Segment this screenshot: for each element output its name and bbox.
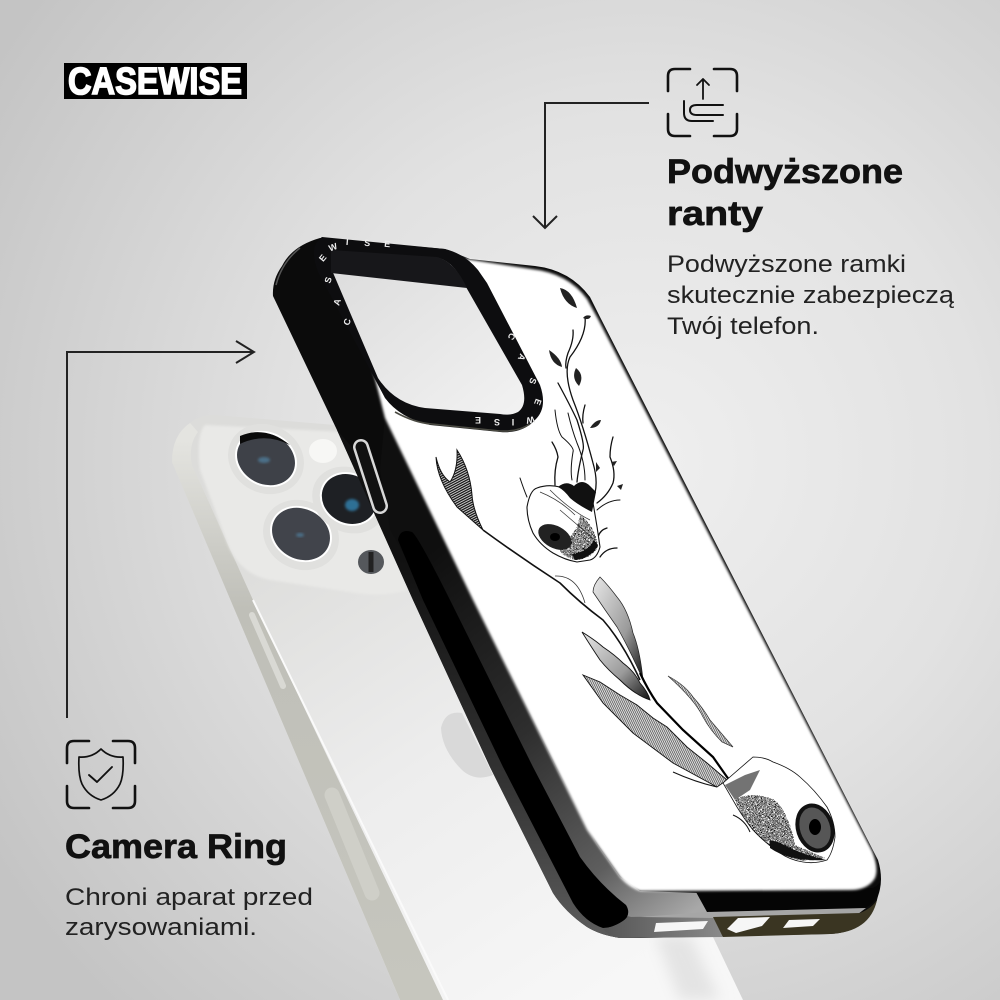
ring lettering: E	[384, 239, 391, 249]
bottom edge olive	[713, 900, 877, 937]
bottom black stripe	[696, 878, 881, 912]
eyeball fold shadows	[725, 770, 760, 800]
ring lettering: E	[532, 397, 544, 407]
ring lettering: W	[327, 241, 339, 253]
ring lettering: W	[525, 414, 536, 426]
heading: Podwyższone ranty: Podwyższone	[667, 153, 903, 191]
icon: raised edges	[668, 69, 737, 136]
case outer rim	[337, 430, 640, 938]
apple logo	[441, 713, 493, 778]
fin top	[593, 577, 643, 680]
ring lettering	[317, 237, 544, 427]
ring lettering: A	[516, 352, 528, 363]
ring lettering: S	[494, 417, 500, 427]
ring lettering: S	[364, 238, 371, 248]
eyeball	[527, 486, 600, 562]
soft streak on back	[655, 935, 720, 1000]
ring lettering: I	[512, 417, 514, 427]
ring lettering: E	[475, 415, 481, 425]
camera plateau	[199, 425, 408, 595]
text: raised edges description: skutecznie zabezpieczą	[667, 282, 955, 309]
ring lettering: A	[331, 297, 343, 307]
ring lettering: E	[317, 253, 328, 264]
case screen	[350, 255, 876, 891]
arrow: camera ring callout	[67, 341, 254, 718]
heading: Camera Ring: Camera Ring	[65, 828, 287, 866]
text: camera ring description: zarysowaniami.	[65, 914, 257, 941]
case	[273, 237, 881, 938]
arrow: top callout	[533, 103, 649, 228]
phone side rim	[172, 423, 443, 1000]
fin middle	[582, 632, 650, 700]
stem loop	[555, 576, 585, 603]
side button upper	[252, 615, 283, 686]
main stroke	[640, 673, 738, 790]
eyeball stipple	[559, 515, 598, 560]
ring lettering: C	[505, 331, 518, 342]
ring lower edge	[395, 412, 530, 431]
side button	[361, 447, 380, 506]
heading: Podwyższone ranty: ranty	[667, 195, 763, 233]
ring lettering: C	[341, 317, 353, 327]
vines	[520, 317, 620, 557]
root mass	[558, 482, 596, 512]
side button lower	[332, 795, 372, 893]
corner gloss	[276, 248, 300, 285]
illustration: lower eye	[582, 577, 841, 863]
side slot	[398, 531, 628, 928]
ring lettering: S	[527, 376, 539, 386]
rim highlight	[253, 600, 448, 1000]
ring inner shade	[331, 250, 467, 288]
eyeball	[723, 757, 835, 863]
camera lenses	[216, 411, 398, 583]
text: raised edges description: Podwyższone ramki	[667, 251, 906, 278]
white phone behind	[172, 415, 743, 1000]
fin lower	[583, 675, 727, 787]
text: raised edges description: Twój telefon.	[667, 313, 819, 340]
ring lettering: S	[322, 276, 334, 284]
camera ring	[314, 237, 543, 432]
port holes	[654, 917, 820, 933]
ring lettering: I	[346, 237, 349, 247]
case side band	[380, 418, 713, 919]
case body	[273, 238, 881, 938]
logo: CASEWISE: CASEWISE	[68, 61, 242, 103]
fin upper	[436, 450, 483, 530]
bottom edge left part	[603, 916, 723, 938]
camera hole	[331, 257, 524, 415]
leaves	[549, 288, 623, 490]
illustration: upper eye	[436, 288, 640, 680]
long stem	[483, 530, 640, 680]
bottom light line	[640, 908, 866, 918]
fin right	[668, 676, 733, 747]
icon: shield check	[67, 741, 135, 808]
eyeball stipple	[735, 795, 825, 861]
text: camera ring description: Chroni aparat przed	[65, 884, 313, 911]
